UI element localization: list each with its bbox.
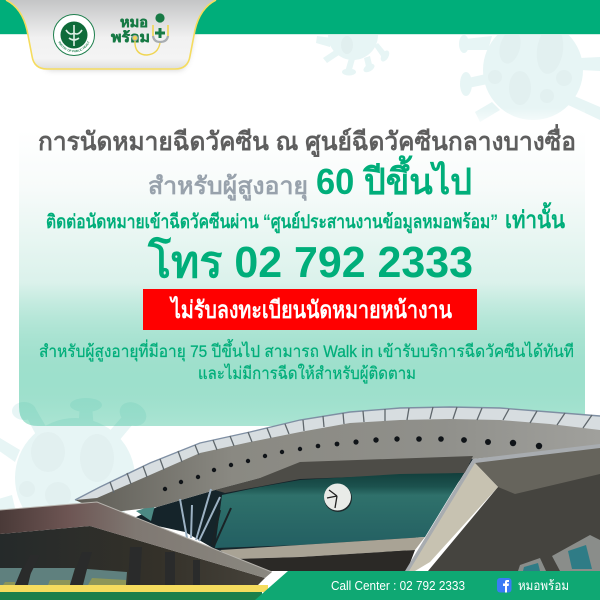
subheading: audience: สำหรับผู้สูงอายุ (148, 173, 308, 202)
logo: mor prom: พร้อม (111, 29, 150, 45)
upper roof band (75, 407, 600, 513)
footer call center: Call Center : 02 792 2333 (331, 578, 465, 593)
red notice banner (143, 289, 477, 330)
roof rivet dots (163, 436, 542, 491)
right wing white soffit (407, 461, 498, 571)
footer green bar (255, 571, 600, 600)
gradient content panel (19, 108, 585, 426)
glass curtain wall (215, 473, 464, 548)
phone number: โทร 02 792 2333 (147, 235, 473, 287)
logo: ministry of public health seal (53, 14, 95, 56)
skylight rail (75, 407, 600, 500)
logo: mor prom: หมอ (120, 14, 148, 30)
right wing glass entrance (523, 545, 592, 571)
right wing entrance frame (518, 535, 600, 571)
red notice banner: ไม่รับลงทะเบียนนัดหมายหน้างาน (169, 295, 452, 324)
v-shaped struts (180, 489, 231, 546)
left wing glazing (0, 568, 127, 585)
walk-in note line 2: และไม่มีการฉีดให้สำหรับผู้ติดตาม (198, 363, 416, 384)
planting behind glazing (3, 578, 126, 585)
dark wall under beam (233, 550, 415, 571)
light glass at far left of arch (136, 505, 155, 521)
roof soffit shadow (215, 456, 473, 493)
clock (324, 484, 352, 512)
emphasis: only: เท่านั้น (505, 201, 566, 234)
subheading: age 60: 60 ปีขึ้นไป (316, 155, 472, 202)
building photo (0, 407, 600, 585)
left wing roof top (0, 502, 272, 578)
right wing underside (430, 446, 600, 571)
concrete beam (220, 537, 425, 559)
virus decoration: top right (459, 20, 600, 122)
icon: facebook (497, 578, 512, 592)
yellow footer stripe (0, 585, 268, 592)
skylight strip (75, 407, 600, 500)
footer facebook name: หมอพร้อม (518, 578, 569, 593)
dark green footer stripe (0, 592, 262, 600)
dark base under arch (130, 459, 473, 552)
right wing top edge (405, 444, 600, 571)
contact instruction: ติดต่อนัดหมายเข้าฉีดวัคซีนผ่าน “ศูนย์ประสานงานข้อมูลหมอพร้อม” (46, 211, 498, 234)
heading: การนัดหมายฉีดวัคซีน ณ ศูนย์ฉีดวัคซีนกลางบางซื่อ (38, 124, 576, 158)
virus decoration: top middle (316, 10, 391, 76)
virus decoration: bottom left (0, 397, 151, 538)
top green bar (0, 0, 600, 35)
logo: mor prom (111, 13, 168, 55)
left wing soffit (0, 526, 265, 585)
header logo tab (6, 0, 216, 70)
left wing columns (15, 547, 200, 585)
